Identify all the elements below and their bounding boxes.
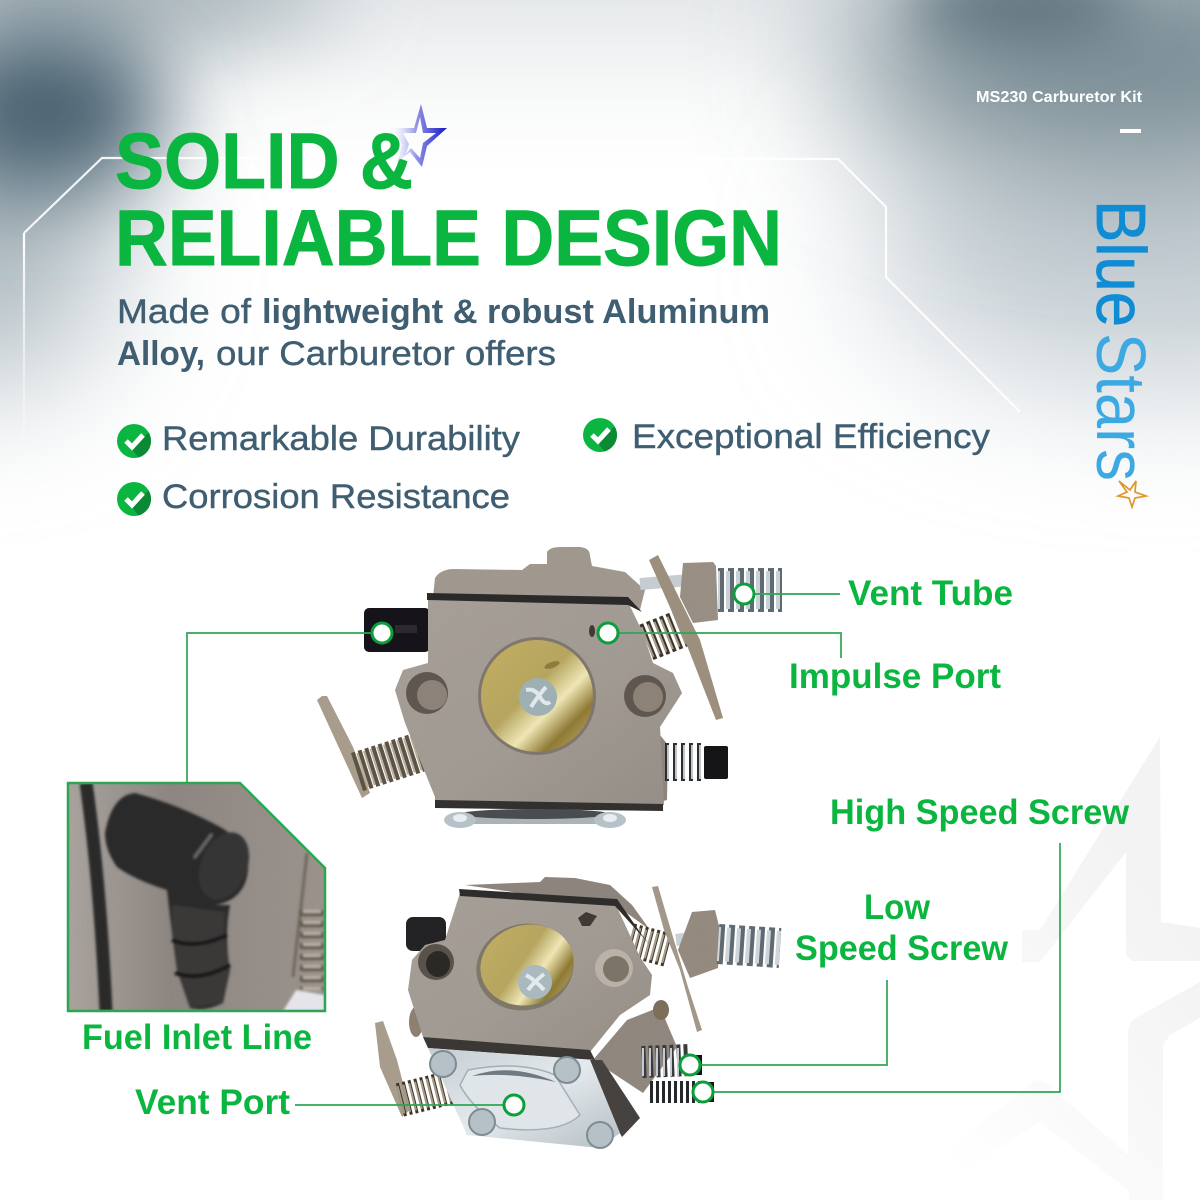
label: Impulse Port: Impulse Port xyxy=(789,657,1001,696)
gaskets xyxy=(427,593,663,811)
port xyxy=(578,912,597,926)
port hole xyxy=(589,625,595,637)
brass cap xyxy=(467,913,583,1021)
right gasket xyxy=(590,1060,640,1137)
side bolt xyxy=(409,1007,423,1037)
title: RELIABLE DESIGN xyxy=(115,193,782,282)
intro text: our Carburetor offers xyxy=(216,335,556,373)
title xyxy=(115,116,782,282)
marker: low speed screw xyxy=(680,1055,700,1075)
left lever and spring xyxy=(375,1021,452,1117)
marker: fuel inlet xyxy=(372,623,392,643)
side bolt right xyxy=(653,1000,669,1020)
marker: vent port xyxy=(504,1095,524,1115)
carburetor: angled view xyxy=(375,877,780,1148)
label: Low Speed Screw: Speed Screw xyxy=(795,929,1009,968)
label: Low Speed Screw: Low xyxy=(864,888,931,927)
top casting and black stub xyxy=(465,877,650,930)
holes xyxy=(418,944,633,987)
screw xyxy=(519,678,557,716)
spring behind lever xyxy=(630,940,668,950)
black fuel inlet stub xyxy=(364,608,430,652)
lower right block and spring xyxy=(636,735,728,808)
plate screws xyxy=(430,1051,613,1148)
brand logo: BlueStars: Stars xyxy=(1082,333,1160,481)
right lever xyxy=(649,555,723,720)
right side block xyxy=(593,1007,677,1093)
brand logo: BlueStars xyxy=(1082,200,1160,507)
top label: product name: MS230 Carburetor Kit xyxy=(976,89,1142,106)
intro text xyxy=(117,293,770,373)
label: Fuel Inlet Line: Fuel Inlet Line xyxy=(82,1018,312,1057)
right nut and screw xyxy=(676,910,780,978)
body face xyxy=(408,893,652,1052)
top casting xyxy=(433,547,645,610)
intro text: lightweight & robust Aluminum xyxy=(262,293,770,331)
bullet: Corrosion Resistance: Corrosion Resistance xyxy=(162,478,510,516)
right lever xyxy=(652,886,702,1032)
icon: blue star xyxy=(393,104,447,167)
label: High Speed Screw: High Speed Screw xyxy=(830,793,1130,832)
dash xyxy=(1120,129,1141,133)
marker: high speed screw xyxy=(693,1082,713,1102)
left lever and spring xyxy=(317,696,420,798)
lower screws xyxy=(642,1055,714,1102)
right spring xyxy=(640,625,690,645)
intro text: Made of xyxy=(117,293,252,331)
body face xyxy=(395,600,682,805)
carburetor: front view xyxy=(317,547,782,828)
lower gasket xyxy=(423,1037,595,1060)
brass cap xyxy=(478,637,596,755)
intro text: Alloy, xyxy=(117,335,205,373)
label: Low Speed Screw xyxy=(795,888,1009,968)
mounting holes xyxy=(406,672,666,717)
inset photo: fuel inlet line xyxy=(68,783,326,1011)
marker: vent tube xyxy=(734,584,754,604)
label: Vent Tube: Vent Tube xyxy=(848,574,1013,613)
bottom plate xyxy=(444,809,626,828)
bullet: Exceptional Efficiency: Exceptional Efficiency xyxy=(632,418,990,456)
label: Vent Port: Vent Port xyxy=(135,1083,290,1122)
marker: impulse port xyxy=(598,623,618,643)
brand logo: BlueStars: Blue xyxy=(1082,200,1160,327)
bullet: Remarkable Durability: Remarkable Durability xyxy=(162,420,520,458)
right nut and screw xyxy=(640,562,782,623)
leader lines xyxy=(187,594,1060,1105)
bottom cover plate xyxy=(428,1048,620,1148)
title: SOLID & xyxy=(115,116,413,205)
